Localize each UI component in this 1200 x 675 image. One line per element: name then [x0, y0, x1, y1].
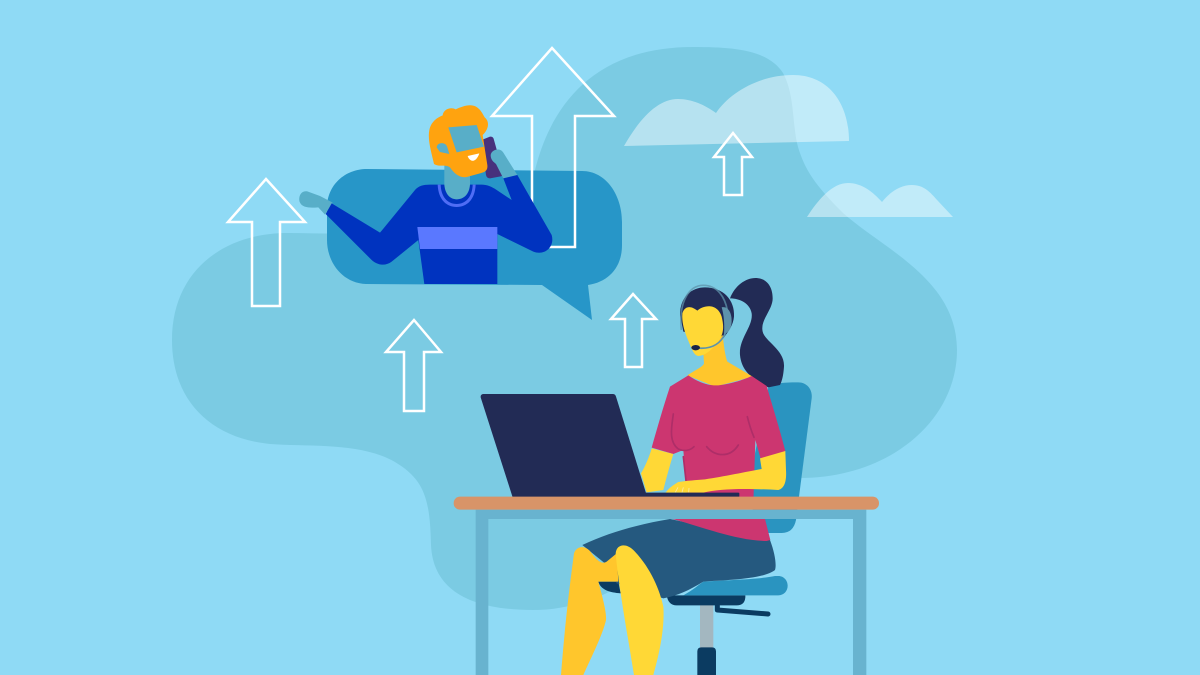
lower body, chair and desk: [454, 497, 879, 675]
shirt hem: [673, 519, 770, 541]
headset mic: [691, 345, 700, 350]
arrow: lower centre: [386, 320, 441, 411]
right arm and hand: [666, 451, 786, 493]
man: sweater stripe: [417, 227, 497, 249]
man: ear: [437, 143, 449, 154]
right leg: [616, 545, 664, 675]
man: hair and beard: [429, 105, 488, 177]
desk top: [454, 497, 879, 510]
face: [682, 306, 723, 356]
laptop base: [643, 493, 739, 497]
chair seat: [683, 576, 788, 595]
man: smile: [468, 153, 479, 161]
arrow: large centre: [492, 48, 614, 247]
speech bubble: [327, 169, 622, 320]
man: phone: [482, 137, 503, 178]
shirt: [652, 375, 785, 503]
cloud: small: [807, 183, 953, 217]
arrow: beside laptop: [611, 294, 656, 367]
neck: [687, 335, 753, 387]
background blob: [172, 47, 957, 610]
chair lever: [717, 606, 768, 614]
man: sweater: [326, 175, 552, 284]
arrow: left: [228, 179, 305, 306]
chair base: [697, 647, 716, 675]
man: left hand: [299, 191, 333, 215]
headset band: [681, 285, 727, 330]
chair pole: [700, 603, 713, 648]
headset mic boom: [697, 333, 725, 348]
chair under-seat shadow: [598, 582, 621, 593]
laptop screen: [481, 394, 647, 497]
man: face: [448, 125, 484, 152]
headset ear cup: [722, 307, 732, 334]
cloud: large: [624, 75, 849, 146]
desk apron and legs: [476, 510, 866, 675]
skirt: [582, 519, 776, 598]
arrow: small upper right: [714, 133, 752, 195]
left arm: [641, 448, 673, 492]
chair back: [752, 382, 812, 533]
ponytail: [730, 278, 784, 387]
man on phone: [299, 105, 552, 284]
woman with laptop: [481, 278, 812, 533]
man: neck: [444, 165, 470, 199]
finger gaps: [675, 487, 689, 492]
head hair: [680, 287, 734, 338]
shirt folds: [671, 414, 754, 487]
man: collar: [438, 185, 476, 207]
man: right hand: [491, 150, 517, 178]
chair seat bracket: [667, 595, 745, 605]
left leg: [561, 547, 618, 675]
